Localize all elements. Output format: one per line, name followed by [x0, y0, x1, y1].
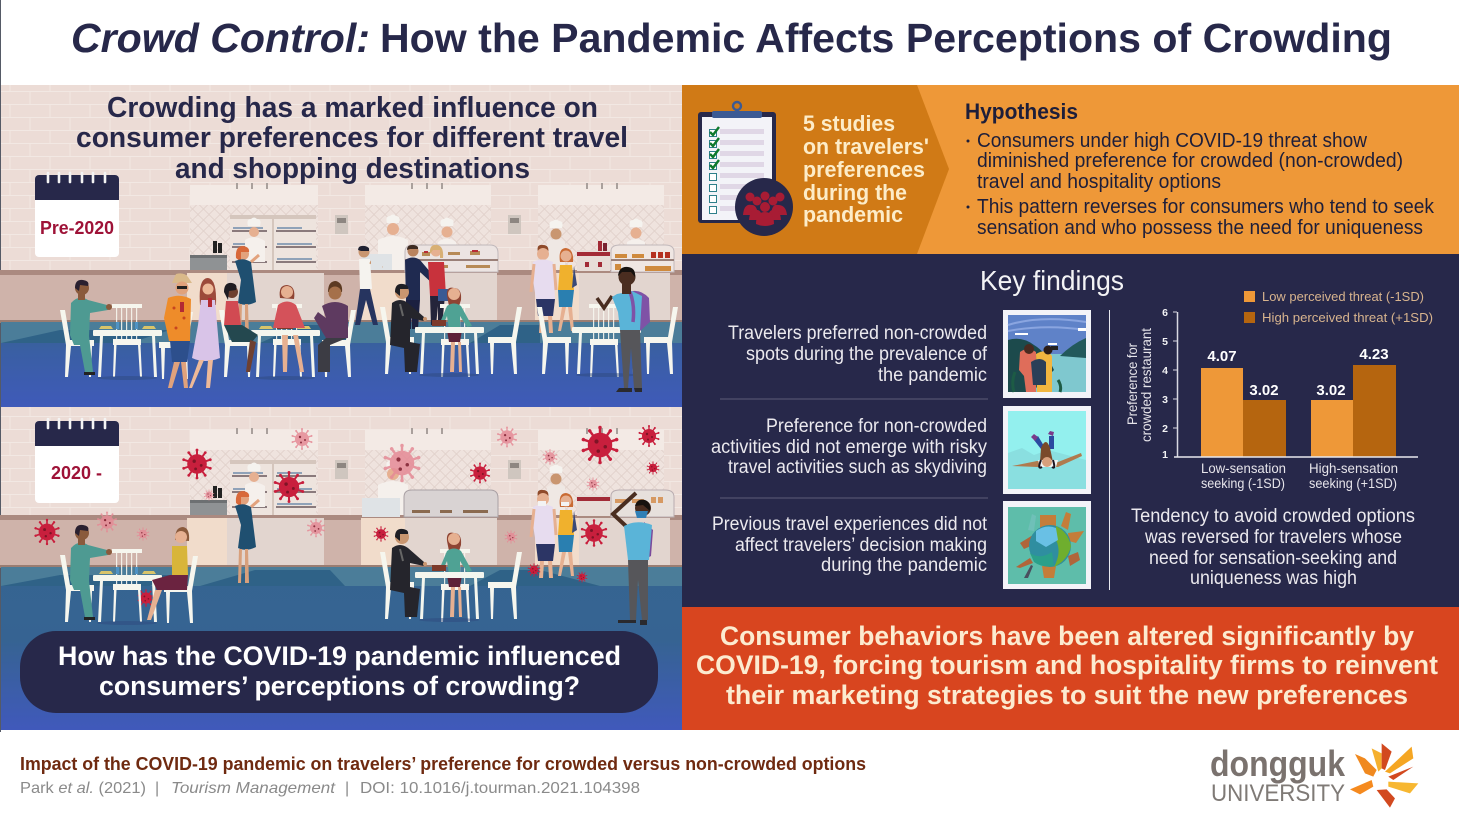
title: Crowd Control:: [71, 15, 370, 61]
heading: crowding influence: [76, 92, 628, 185]
category labels: High-sensation: [1309, 460, 1398, 476]
logo: dongguk university: [1210, 743, 1418, 808]
footer citation: DOI: 10.1016/j.tourman.2021.104398: [360, 780, 640, 797]
callout: research question pill: How has the COVID-19 pandemic influenced: [58, 641, 621, 671]
y axis ticks: 2: [1162, 423, 1168, 435]
category labels: [1201, 460, 1398, 491]
y axis ticks: 4: [1162, 365, 1168, 377]
text: five studies: preferences: [803, 157, 925, 182]
chefs with masks: [245, 460, 565, 515]
y axis ticks: 6: [1162, 307, 1168, 319]
panel: pre-2020 restaurant scene: [0, 85, 682, 407]
y axis ticks: 1: [1162, 449, 1168, 461]
bars: [1201, 365, 1396, 457]
person: woman in yellow top: [558, 248, 577, 331]
text: hypothesis bullets: diminished preference for crowded (non-crowded): [977, 150, 1403, 172]
value labels: 4.07: [1207, 348, 1237, 365]
image: travelers photographing landscape: [1003, 310, 1091, 398]
heading: key findings: Key findings: [980, 265, 1124, 296]
calendar: pre-2020: [35, 173, 119, 257]
person: man with backpack: [597, 267, 650, 392]
footer citation: [20, 754, 866, 797]
icon: crowd in circle: [735, 178, 793, 236]
y axis title: Preference for: [1124, 343, 1140, 425]
finding three text: affect travelers’ decision making: [735, 535, 987, 556]
person: woman in red top: [428, 245, 448, 325]
footer citation: |: [345, 780, 349, 797]
heading: crowding influence: consumer preferences for different travel: [76, 122, 628, 154]
panel: key findings: [682, 254, 1459, 607]
text: five studies: pandemic: [803, 202, 903, 227]
panel: conclusion: their marketing strategies to suit the new preferences: [726, 680, 1408, 710]
viruses, faded: [97, 427, 599, 544]
text: five studies: 5 studies: [803, 111, 895, 136]
chart caption: uniqueness was high: [1190, 568, 1357, 589]
person: walking waiter: [355, 246, 382, 325]
logo: dongguk university: UNIVERSITY: [1211, 780, 1345, 807]
person: woman in lilac dress: [189, 278, 220, 388]
person: seated woman in teal top: [439, 533, 472, 617]
icon: clipboard: [698, 102, 776, 223]
person: man in pale shirt: [531, 245, 556, 333]
y axis title: [1124, 328, 1154, 442]
finding two text: [711, 416, 987, 478]
finding one text: [728, 323, 988, 386]
category labels: Low-sensation: [1201, 460, 1286, 476]
title: How the Pandemic Affects Perceptions of Crowding: [380, 15, 1392, 61]
table group one: [60, 549, 198, 625]
person: waitress: [235, 491, 259, 583]
chart caption: was reversed for travelers whose: [1144, 527, 1402, 548]
finding three text: [712, 514, 988, 576]
finding three text: during the pandemic: [821, 555, 987, 576]
page left edge: [0, 0, 1, 732]
heading: crowding influence: Crowding has a marked influence on: [107, 92, 598, 124]
text: hypothesis bullets: travel and hospitality options: [977, 171, 1221, 193]
panel: conclusion: COVID-19, forcing tourism and hospitality firms to reinvent: [696, 650, 1438, 680]
person: seated man in black suit: [390, 529, 427, 617]
person: seated woman in teal top: [439, 288, 472, 372]
text: five studies: [803, 111, 929, 227]
display cases: [362, 490, 674, 517]
calendar: pre-2020: Pre-2020: [40, 218, 114, 238]
finding one text: spots during the prevalence of: [746, 344, 988, 365]
table group four: [537, 304, 678, 377]
viruses, red: [34, 425, 660, 607]
text: hypothesis bullets: [966, 130, 1435, 239]
chart caption: Tendency to avoid crowded options: [1131, 506, 1415, 527]
logo: dongguk university: dongguk: [1210, 743, 1346, 784]
finding two text: activities did not emerge with risky: [711, 437, 987, 458]
panel: 2020 onward restaurant scene: [0, 407, 682, 730]
person: man in navy jacket: [405, 245, 437, 329]
finding three text: Previous travel experiences did not: [712, 514, 988, 535]
person: man in orange shirt: [164, 273, 192, 388]
chart caption: [1131, 506, 1415, 589]
category labels: seeking (+1SD): [1309, 475, 1397, 491]
value labels: 4.23: [1359, 346, 1389, 363]
person: seated man in teal suit: [70, 525, 112, 620]
person: seated woman in red dress: [273, 285, 305, 372]
footer citation: |: [155, 780, 159, 797]
image: globe with landmarks: [1003, 501, 1091, 589]
legend: [1244, 289, 1433, 325]
chefs behind counter: [245, 214, 645, 270]
legend: Low perceived threat (-1SD): [1262, 289, 1424, 304]
person: seated woman in yellow top: [147, 527, 189, 620]
finding two text: travel activities such as skydiving: [728, 457, 987, 478]
bar chart: preference for crowded restaurant: [1124, 289, 1433, 491]
studies arrow: [682, 85, 949, 254]
table group three: [380, 549, 522, 622]
person: masked man with raised arms: [613, 493, 653, 625]
display cases: [362, 241, 674, 272]
legend: High perceived threat (+1SD): [1262, 310, 1433, 325]
finding one text: the pandemic: [878, 365, 987, 386]
person: seated man in teal suit: [70, 280, 112, 375]
callout: research question pill: [20, 631, 658, 713]
y axis ticks: [1162, 307, 1168, 461]
y axis ticks: 3: [1162, 394, 1168, 406]
person: waitress: [235, 246, 259, 338]
table three: [415, 320, 484, 377]
table group two: [219, 304, 356, 380]
text: five studies: on travelers': [803, 134, 929, 159]
table three: [415, 565, 484, 622]
value labels: 3.02: [1249, 382, 1279, 399]
panel: conclusion: Consumer behaviors have been altered significantly by: [720, 621, 1414, 651]
heading: crowding influence: and shopping destinations: [175, 153, 530, 185]
table group three: [380, 304, 522, 377]
panel: hypothesis: [682, 85, 1459, 254]
finding one text: Travelers preferred non-crowded: [728, 323, 987, 344]
chart caption: need for sensation-seeking and: [1149, 548, 1397, 569]
person: seated man in purple shirt: [314, 281, 348, 372]
finding two text: Preference for non-crowded: [766, 416, 987, 437]
text: hypothesis bullets: sensation and who possess the need for uniqueness: [977, 217, 1423, 239]
text: hypothesis heading: Hypothesis: [965, 99, 1078, 124]
footer citation: Park et al. (2021): [20, 780, 146, 797]
panel divider: [1109, 310, 1110, 590]
calendar: 2020 onward: [35, 419, 119, 503]
text: hypothesis bullets: This pattern reverses for consumers who tend to seek: [977, 196, 1435, 218]
category labels: seeking (-1SD): [1201, 475, 1285, 491]
value labels: 3.02: [1316, 382, 1346, 399]
text: five studies: during the: [803, 180, 907, 205]
callout: research question pill: consumers’ perceptions of crowding?: [99, 671, 580, 701]
icon: sun emblem: [1350, 743, 1418, 808]
table group one: [60, 304, 193, 380]
panel: conclusion: [682, 607, 1459, 730]
y axis title: crowded restaurant: [1138, 328, 1154, 442]
footer citation: Impact of the COVID-19 pandemic on travelers’ preference for crowded versus non-crowded options: [20, 754, 866, 774]
footer citation: Tourism Management: [171, 780, 336, 797]
person: seated woman in red top: [224, 283, 258, 372]
value labels: [1207, 346, 1389, 399]
person: seated man in black suit: [390, 284, 427, 372]
calendar: 2020 onward: 2020 -: [51, 463, 102, 483]
image: skydiver: [1003, 406, 1091, 494]
y axis ticks: 5: [1162, 336, 1168, 348]
person: masked woman in yellow top: [558, 493, 577, 576]
text: hypothesis bullets: Consumers under high COVID-19 threat show: [977, 130, 1368, 152]
person: masked man in pale shirt: [531, 490, 556, 578]
